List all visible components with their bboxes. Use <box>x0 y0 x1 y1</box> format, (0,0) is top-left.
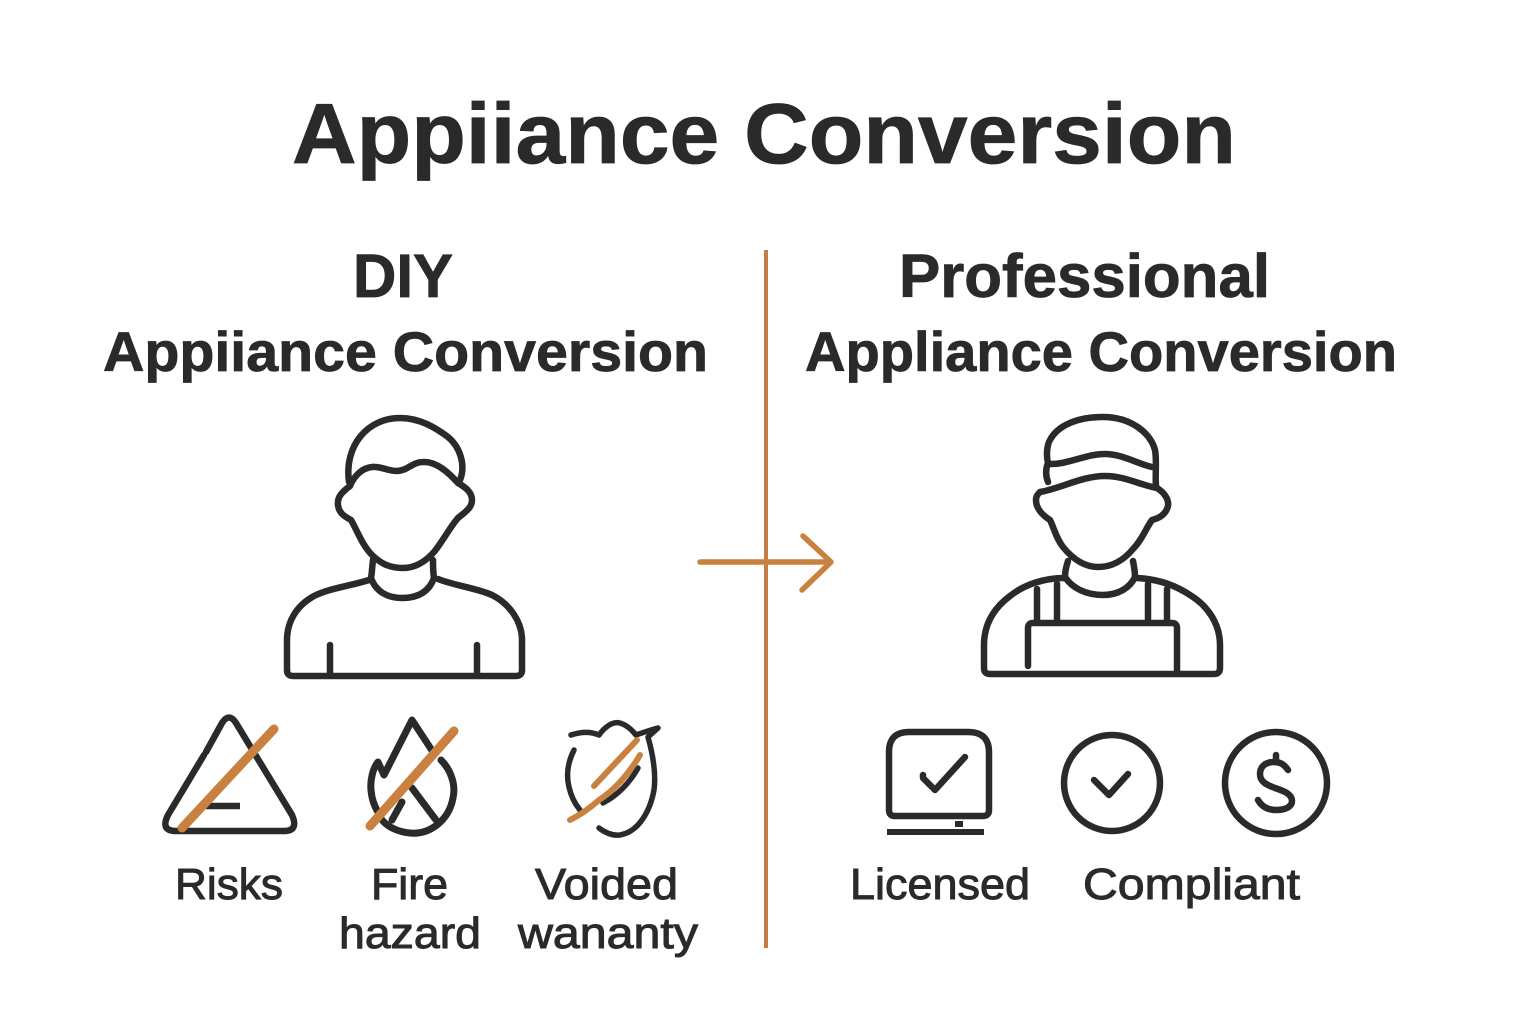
panel: professional <box>805 242 1397 909</box>
label: fire hazard <box>339 860 481 958</box>
subheading: DIY appliance conversion: Appiiance Conversion <box>103 320 708 383</box>
label: voided warranty <box>517 860 698 958</box>
label: compliant: Compliant <box>1083 860 1300 909</box>
center divider <box>764 250 768 948</box>
label: fire hazard: Fire <box>371 860 448 909</box>
heading: professional: Professional <box>899 242 1270 310</box>
label: risks: Risks <box>175 860 283 909</box>
icon: dollar circle <box>1225 732 1327 834</box>
icon: fire hazard <box>370 720 454 833</box>
icon: DIY person <box>287 418 522 676</box>
icon: voided warranty shield <box>568 723 658 835</box>
label: voided warranty: wananty <box>517 909 698 958</box>
panel: DIY <box>103 242 708 958</box>
label: voided warranty: Voided <box>535 860 678 909</box>
arrow: DIY to professional <box>700 536 831 590</box>
subheading: professional appliance conversion: Appliance Conversion <box>805 320 1397 383</box>
icon: compliant circle check <box>1064 735 1160 831</box>
label: fire hazard: hazard <box>339 909 481 958</box>
icon: risks warning triangle <box>165 718 294 831</box>
heading: DIY: DIY <box>353 242 453 310</box>
icon: professional technician <box>984 417 1220 674</box>
title: Appiiance Conversion <box>292 87 1236 182</box>
icon: licensed monitor check <box>887 732 989 835</box>
label: licensed: Licensed <box>850 860 1030 909</box>
